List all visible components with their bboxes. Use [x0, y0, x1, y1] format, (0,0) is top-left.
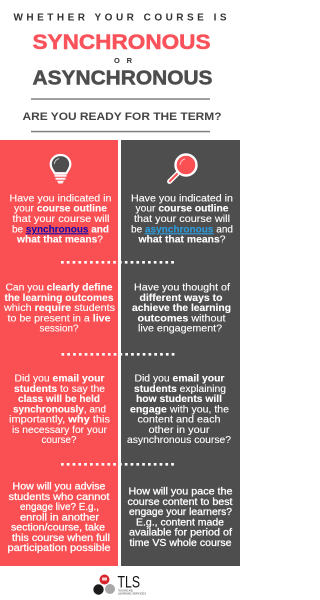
- icon: magnifying glass: [170, 154, 196, 182]
- text: sync question 2: the learning outcomes: [4, 293, 114, 304]
- text: async question 3: other in your: [148, 425, 210, 436]
- text: sync question 2: session?: [40, 324, 79, 335]
- text: async question 2: different ways to: [140, 293, 222, 304]
- text: async question 1: your course outline: [136, 204, 229, 215]
- text: async question 4: E.g., content made: [136, 517, 224, 528]
- logo: TLS: TEACHING AND: [118, 588, 133, 592]
- text: async question 2: [132, 283, 231, 335]
- dotted divider 3: [61, 463, 176, 466]
- text: sync question 1: what that means?: [16, 235, 103, 246]
- text: sync question 1: your course outline: [14, 204, 107, 215]
- text: async question 4: time VS whole course: [130, 538, 232, 549]
- dotted divider 2: [62, 353, 176, 356]
- text: sync question 2: Can you clearly define: [6, 283, 113, 294]
- header: [14, 13, 227, 132]
- text: async question 4: engage your learners?: [129, 507, 232, 518]
- logo: TLS: LEARNING SERVICES: [118, 591, 146, 595]
- text: sync question 1: [10, 193, 112, 246]
- text: sync question 4: enroll in another: [20, 512, 100, 523]
- text: async question 2: outcomes without: [138, 313, 226, 324]
- text: async question 3: asynchronous course?: [127, 435, 231, 446]
- text: sync question 2: [3, 283, 115, 335]
- text: sync question 3: class will be held: [18, 394, 100, 405]
- text: async question 3: how students will: [136, 394, 222, 405]
- text: sync question 3: Did you email your: [14, 374, 105, 385]
- text: async question 2: achieve the learning: [132, 303, 231, 314]
- text: async question 1: be asynchronous and: [131, 224, 233, 235]
- text: sync question 4: engage live? E.g.,: [20, 502, 99, 513]
- text: sync question 3: [9, 374, 110, 446]
- text: async question 1: that your course will: [134, 214, 230, 225]
- text: sync question 1: be synchronous and: [12, 224, 109, 235]
- text: sync question 2: which require students: [3, 303, 115, 314]
- text: async question 3: [127, 374, 231, 446]
- text: or: OR: [114, 56, 133, 65]
- text: sync question 1: that your course will: [12, 214, 110, 225]
- text: async question 1: what that means?: [137, 235, 226, 246]
- text: sync question 4: this course when full: [12, 533, 110, 544]
- text: async question 1: [131, 193, 233, 246]
- text: async question 3: content and each: [138, 415, 220, 426]
- text: sync question 3: course?: [42, 435, 77, 446]
- text: sync question 3: importantly, why this: [9, 415, 110, 426]
- text: sync question 4: section/course, take: [11, 523, 105, 534]
- text: sync question 2: to be present in a live: [8, 313, 111, 324]
- text: async question 3: Did you email your: [134, 374, 225, 385]
- title: synchronous: SYNCHRONOUS: [32, 31, 210, 54]
- logo: TLS: [93, 573, 146, 595]
- text: sync question 4: students who cannot: [8, 492, 110, 503]
- text: async question 2: live engagement?: [138, 324, 222, 335]
- title: asynchronous: ASYNCHRONOUS: [32, 68, 212, 90]
- text: async question 3: students explaining: [134, 384, 226, 395]
- text: async question 4: [128, 487, 233, 549]
- text: async question 4: available for period of: [129, 528, 232, 539]
- text: async question 1: Have you indicated in: [131, 193, 233, 204]
- logo: TLS: TLS: [118, 573, 140, 591]
- text: sync question 3: synchronously, and: [13, 404, 106, 415]
- text: sync question 3: is necessary for your: [12, 425, 108, 436]
- panel: asynchronous: [121, 140, 240, 566]
- text: async question 3: engage with you, the: [130, 404, 229, 415]
- text: async question 4: How will you pace the: [128, 487, 233, 498]
- text: sync question 3: students to say the: [14, 384, 105, 395]
- text: sync question 4: participation possible: [8, 543, 111, 554]
- panel: synchronous: [0, 140, 118, 566]
- text: sync question 1: Have you indicated in: [10, 193, 112, 204]
- icon: light bulb: [51, 155, 70, 184]
- heading: whether your course is: WHETHER YOUR COURSE IS: [14, 13, 227, 24]
- text: async question 2: Have you thought of: [134, 283, 230, 294]
- text: async question 4: course content to best: [128, 497, 233, 508]
- subheading: are you ready: ARE YOU READY FOR THE TERM?: [22, 111, 222, 123]
- dotted divider 1: [61, 261, 176, 264]
- text: sync question 4: How will you advise: [12, 482, 106, 493]
- text: sync question 4: [8, 482, 111, 554]
